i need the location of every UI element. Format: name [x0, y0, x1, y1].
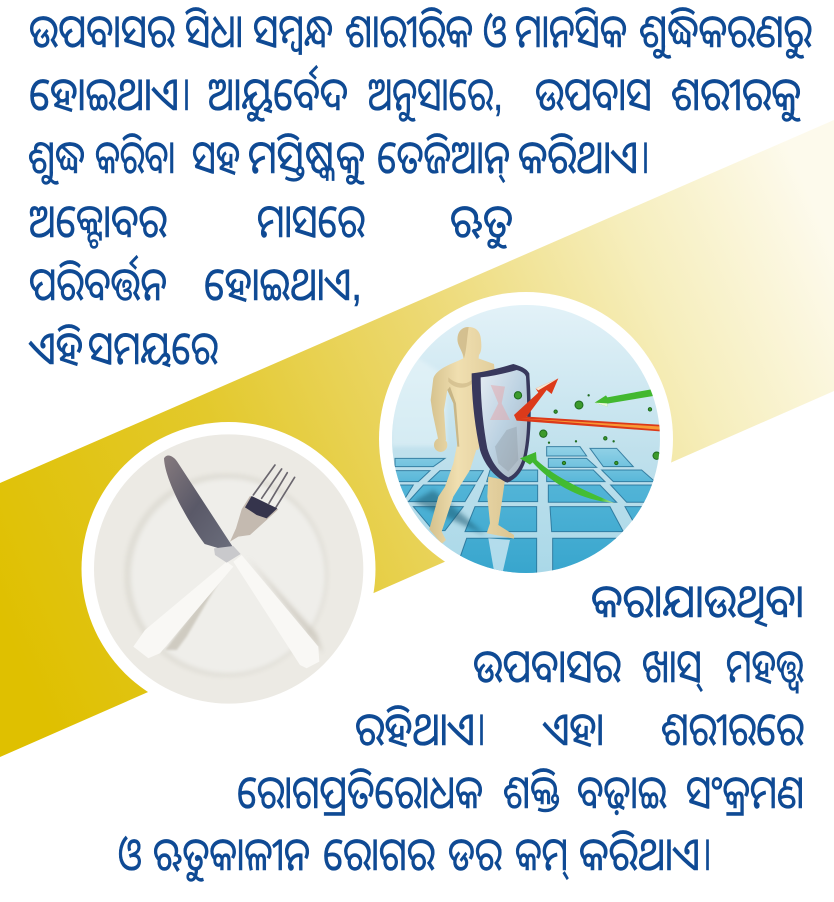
line 10: ବଢ଼ାଇ: [577, 766, 667, 818]
line 10: ଶକ୍ତି: [503, 766, 560, 818]
line 1: ଓ: [483, 5, 507, 57]
line 1: ଶାରୀରିକ: [345, 5, 473, 57]
fork: [253, 465, 295, 507]
paragraph: top text block: [28, 5, 812, 374]
plate: [94, 434, 363, 704]
line 2: ।: [183, 68, 190, 120]
shield: [472, 364, 531, 483]
arrow: green lower: [520, 452, 615, 503]
line 3: ।: [642, 131, 649, 183]
human figure: [429, 327, 514, 544]
floor tiles: [395, 447, 655, 577]
diagonal gold band: [0, 120, 834, 757]
line 11: କମ୍: [515, 828, 569, 880]
line 4: ମାସରେ: [257, 195, 365, 247]
line 10: ରୋଗପ୍ରତିରୋଧକ: [237, 766, 483, 818]
line 4: [29, 195, 513, 249]
line 3: କରିବା: [95, 131, 175, 183]
line 3: ମସ୍ତିଷ୍କକୁ: [248, 131, 365, 185]
line 6: ଏହି: [28, 322, 83, 374]
line 8: ଖାସ୍: [642, 640, 703, 692]
line 11: ଡର: [448, 828, 502, 880]
line 5: ପରିବର୍ତ୍ତନ: [29, 255, 167, 310]
knife handle: [233, 555, 319, 668]
line 3: ଶୁଦ୍ଧ: [28, 131, 85, 185]
photo: shield illustration in white circle: [379, 292, 673, 586]
line 10: ସଂକ୍ରମଣ: [686, 766, 804, 818]
handle shadows: [165, 568, 227, 650]
line 8: [473, 640, 804, 694]
line 9: [355, 703, 804, 755]
line 5: [29, 255, 362, 310]
photo: empty plate with knife and fork in white circle: [82, 422, 376, 716]
line 1: ମାନସିକ: [515, 5, 627, 57]
arrow: red orange deflected: [514, 378, 663, 432]
arrow: green upper: [595, 389, 653, 407]
line 9: ରହିଥାଏ: [355, 703, 475, 755]
line 6: ସମୟରେ: [88, 322, 218, 374]
line 2: ଉପବାସ: [535, 68, 652, 120]
line 3: [28, 131, 649, 185]
line 2: ହୋଇଥାଏ: [29, 68, 179, 120]
line 10: [237, 766, 804, 818]
line 11: କରିଥାଏ: [579, 828, 700, 880]
line 2: ଅନୁସାରେ,: [368, 68, 503, 122]
line 5: ହୋଇଥାଏ,: [204, 258, 362, 310]
line 11: ।: [704, 828, 711, 880]
line 3: କରିଥାଏ: [518, 131, 638, 183]
knife: [164, 456, 233, 551]
line 8: ଉପବାସର: [473, 640, 621, 692]
line 2: [29, 65, 801, 122]
green germs: [514, 392, 660, 465]
line 2: ଆୟୁର୍ବେଦ: [208, 65, 348, 122]
line 3: ତେଜିଆନ୍: [377, 131, 510, 183]
line 3: ସହ: [192, 131, 240, 183]
line 9: ।: [478, 703, 485, 755]
line 11: ଓ: [118, 828, 142, 880]
fork handle: [133, 562, 233, 658]
line 1: ସମ୍ବନ୍ଧ: [253, 5, 333, 57]
shadow: [413, 490, 485, 535]
line 4: ଋତୁ: [450, 195, 513, 249]
reflection: [488, 538, 510, 571]
line 1: ସିଧା: [185, 5, 243, 57]
line 4: ଅକ୍ଟୋବର: [29, 195, 167, 249]
line 11: ଋତୁକାଳୀନ: [153, 828, 310, 882]
line 1: [29, 5, 812, 59]
line 8: ମହତ୍ତ୍ୱ: [726, 640, 804, 694]
paragraph: bottom text block: [118, 575, 804, 882]
line 9: ଏହା: [542, 703, 604, 755]
line 11: [118, 828, 711, 882]
line 11: ରୋଗର: [323, 828, 435, 880]
line 9: ଶରୀରରେ: [661, 703, 804, 755]
line 2: ଶରୀରକୁ: [671, 68, 801, 122]
line 1: ଉପବାସର: [29, 5, 175, 57]
line 6: [28, 322, 218, 374]
line 7: କରାଯାଉଥିବା: [591, 575, 804, 627]
